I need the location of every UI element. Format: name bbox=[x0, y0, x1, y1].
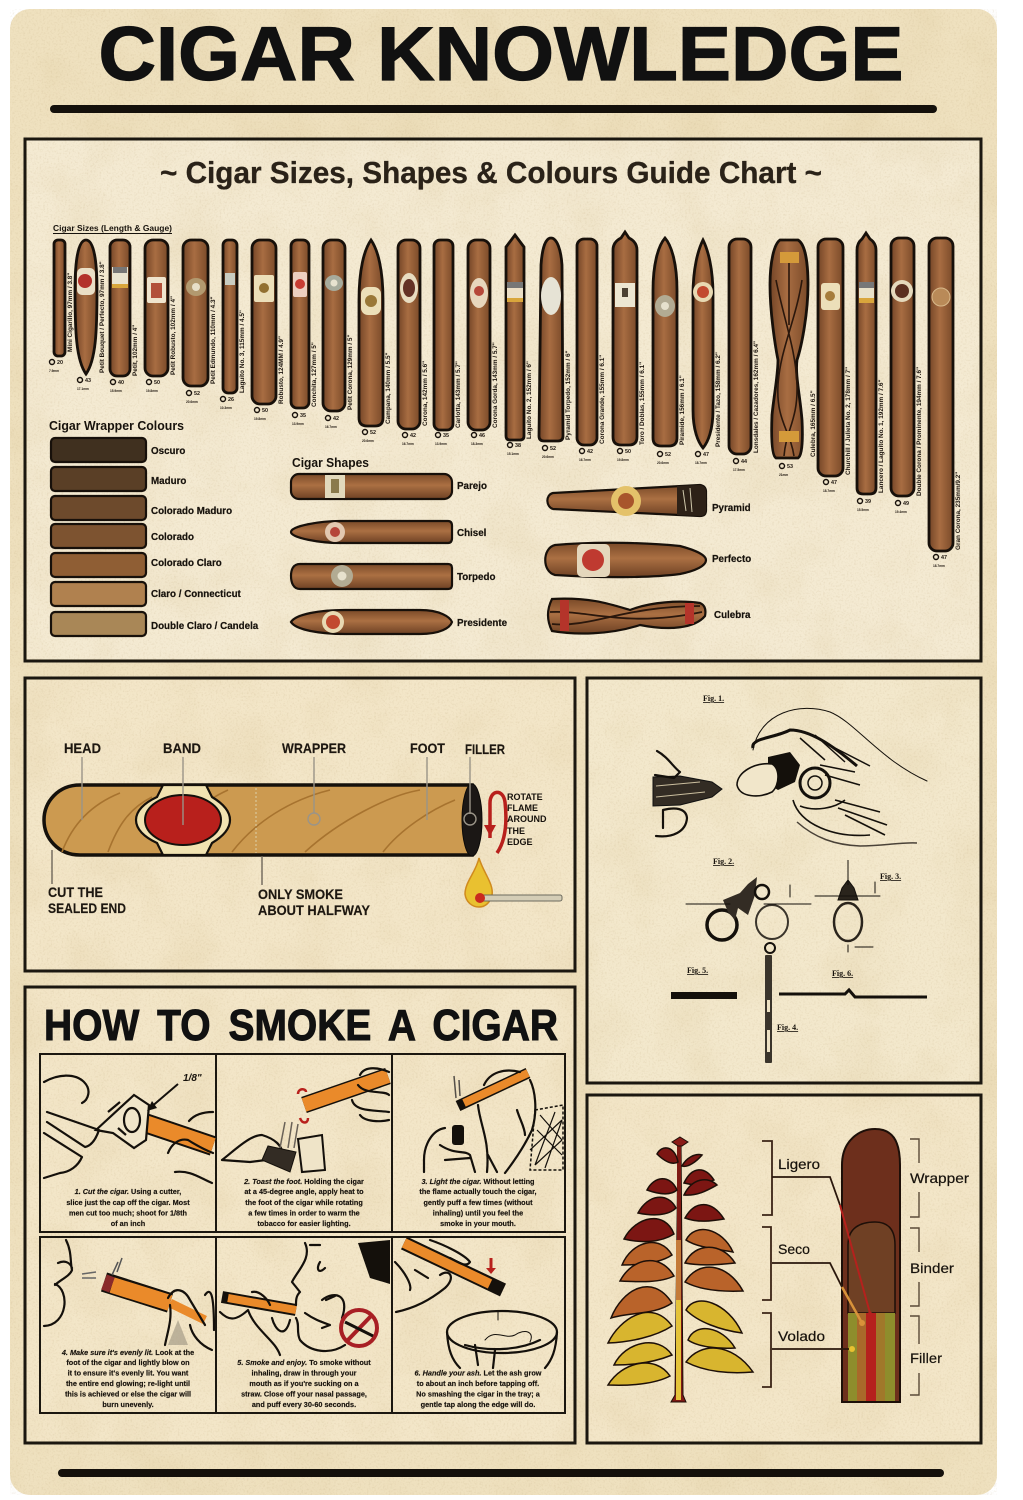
step 4: make sure it is evenly lit: foot of the cigar and lightly blow on bbox=[66, 1358, 190, 1367]
cigar 20: lonsdales: Lonsdales / Cazadores, 162mm / 6.4" bbox=[753, 341, 760, 453]
cigar 14: laguito no. 2: Laguito No. 2, 152mm / 6" bbox=[526, 361, 533, 439]
cigar 20: lonsdales bbox=[729, 239, 760, 472]
step 4: make sure it is evenly lit: the entire end glowing; re-light until bbox=[66, 1379, 190, 1388]
shape: parejo bbox=[291, 474, 487, 499]
cigar 17: toro: 19.8mm bbox=[617, 458, 629, 462]
cigar shapes heading: Cigar Shapes bbox=[292, 455, 369, 470]
step 3: light the cigar: 3. Light the cigar. Without letting bbox=[421, 1177, 535, 1186]
step 2: toast the foot: 2. Toast the foot. Holding the cigar bbox=[244, 1177, 364, 1186]
filler leaves bbox=[848, 1313, 895, 1401]
cigar 14: laguito no. 2: 38 bbox=[515, 443, 521, 449]
step 3: light the cigar: inhaling) until you feel the bbox=[433, 1208, 523, 1218]
cigar 2: petit bouquet: Petit Bouquet / Perfecto, 97mm / 3.8" bbox=[99, 261, 106, 373]
cigar 19: presidente bbox=[693, 240, 722, 465]
swatch: claro connecticut: Claro / Connecticut bbox=[151, 589, 242, 600]
cigar 17: toro: 50 bbox=[625, 449, 631, 455]
step 4: make sure it is evenly lit: this is achieved or else the cigar will bbox=[65, 1390, 191, 1398]
step 4: make sure it is evenly lit: 4. Make sure it's evenly lit. Look at the bbox=[62, 1348, 194, 1357]
leader lines bbox=[52, 757, 476, 885]
cigar 11: corona bbox=[398, 240, 429, 446]
shape: perfecto: Perfecto bbox=[712, 554, 751, 565]
step 1: cut the cigar: slice just the cap off the cigar. Most bbox=[66, 1198, 190, 1207]
step 1: cut the cigar: men cut too much; shoot for 1/8th bbox=[69, 1208, 187, 1218]
cigar 16: corona grande: 16.7mm bbox=[579, 458, 591, 462]
cigar 15: pyramid torpedo: 52 bbox=[550, 446, 556, 452]
step 1: cut the cigar: of an inch bbox=[111, 1219, 145, 1228]
cigar 10: campana: 52 bbox=[370, 430, 376, 436]
cigar 10: campana: 20.6mm bbox=[362, 439, 374, 443]
cigar 2: petit bouquet: 17.1mm bbox=[77, 387, 89, 391]
swatch: double claro candela: Double Claro / Candela bbox=[151, 621, 259, 632]
figure 5 and 6: side bars bbox=[671, 966, 927, 999]
shape: perfecto bbox=[545, 543, 751, 577]
step 2: toast the foot bbox=[222, 1068, 389, 1228]
anatomy labels: WRAPPER bbox=[282, 740, 346, 756]
leaves orange bbox=[611, 1230, 743, 1318]
anatomy notes bbox=[48, 884, 371, 918]
cigar 4: petit robusto: 19.8mm bbox=[146, 389, 158, 393]
step 2: toast the foot: the foot of the cigar while rotating bbox=[245, 1198, 363, 1207]
construction brackets and labels: Binder bbox=[910, 1260, 954, 1276]
shape: parejo: Parejo bbox=[457, 481, 487, 492]
cigar 3: petit: 15.9mm bbox=[110, 389, 122, 393]
cigar 16: corona grande: Corona Grande, 155mm / 6.1" bbox=[599, 355, 606, 444]
step 4: make sure it is evenly lit: it to ensure it's evenly lit. You want bbox=[68, 1368, 189, 1378]
cigar 24: double corona: Double Corona / Prominente, 194mm / 7.6" bbox=[916, 367, 923, 496]
cigar 13: corona gorda bbox=[468, 240, 499, 446]
cigar 13: corona gorda: Corona Gorda, 143mm / 5.7" bbox=[492, 342, 499, 428]
leaf brackets and labels: Volado bbox=[778, 1328, 825, 1344]
cigar 22: churchill: 18.7mm bbox=[823, 489, 835, 493]
cigar 25: gran corona: 47 bbox=[941, 555, 947, 561]
cigar 22: churchill bbox=[818, 239, 852, 493]
swatch: colorado maduro bbox=[51, 496, 232, 520]
anatomy labels: FILLER bbox=[465, 741, 505, 757]
cigar 7: robusto: 19.8mm bbox=[254, 417, 266, 421]
rotate flame arrow: FLAME bbox=[507, 803, 538, 813]
cigar 7: robusto: Robusto, 124MM / 4.9" bbox=[278, 336, 285, 404]
cigar 8: conchita: 13.9mm bbox=[292, 422, 304, 426]
construction brackets and labels: Filler bbox=[910, 1350, 942, 1366]
cigar 5: petit edmundo bbox=[183, 240, 217, 404]
cigar 21: culebra: Culebra, 165mm / 6.5" bbox=[810, 390, 817, 457]
cigar 17: toro: Toro / Doblas, 155mm / 6.1" bbox=[639, 362, 646, 445]
step 3: light the cigar: the flame actually touch the cigar, bbox=[419, 1187, 537, 1196]
cigar sizes subheading: Cigar Sizes (Length & Gauge) bbox=[53, 224, 172, 233]
leaf brackets and labels: Ligero bbox=[778, 1156, 820, 1172]
cigar 1: mini cigarillo: Mini Cigarillo, 97mm / 3.8" bbox=[67, 273, 74, 352]
cigar 15: pyramid torpedo: 20.6mm bbox=[542, 455, 554, 459]
plant stem bbox=[671, 1140, 686, 1402]
cigar 15: pyramid torpedo bbox=[539, 238, 572, 459]
figure 4: cutter handle bbox=[765, 943, 798, 1063]
cigar 25: gran corona: 18.7mm bbox=[933, 564, 945, 568]
top rule bbox=[54, 105, 933, 113]
cigar 11: corona: Corona, 142mm / 5.6" bbox=[422, 361, 429, 426]
cigar 18: piramide: 52 bbox=[665, 452, 671, 458]
cigar 12: carlotta bbox=[434, 240, 462, 446]
leaf brackets and labels: Seco bbox=[778, 1241, 810, 1257]
rotate flame arrow: ROTATE bbox=[507, 792, 543, 802]
rotate flame arrow bbox=[484, 792, 547, 853]
step 5: smoke and enjoy: inhaling, draw in through your bbox=[252, 1368, 357, 1378]
anatomy notes: CUT THE bbox=[48, 884, 103, 900]
cigar 5: petit edmundo: Petit Edmundo, 110mm / 4.3" bbox=[210, 296, 217, 384]
panel: tobacco plant and cigar construction bbox=[587, 1095, 981, 1443]
cigar 5: petit edmundo: 20.6mm bbox=[186, 400, 198, 404]
step 6: handle your ash: 6. Handle your ash. Let the ash grow bbox=[415, 1368, 541, 1378]
cigar 3: petit bbox=[110, 240, 139, 393]
cigar 6: laguito no. 3: 26 bbox=[228, 397, 234, 403]
cigar 23: lancero: 39 bbox=[865, 499, 871, 505]
shape: culebra bbox=[548, 599, 751, 633]
step 3: light the cigar: gently puff a few times (without bbox=[423, 1198, 533, 1207]
swatch: maduro bbox=[51, 467, 186, 491]
wrapper colours heading: Cigar Wrapper Colours bbox=[49, 418, 184, 433]
shape: presidente: Presidente bbox=[457, 618, 508, 629]
panel: how to smoke a cigar bbox=[25, 987, 575, 1443]
cigar 20: lonsdales: 17.5mm bbox=[733, 468, 745, 472]
anatomy labels: BAND bbox=[163, 740, 201, 756]
cigar 1: mini cigarillo bbox=[49, 240, 74, 373]
cigar 11: corona: 42 bbox=[410, 433, 416, 439]
cigar 18: piramide: 20.6mm bbox=[657, 461, 669, 465]
step 5: smoke and enjoy: 5. Smoke and enjoy. To smoke without bbox=[237, 1358, 371, 1367]
figure 4: cutter handle: Fig. 4. bbox=[777, 1023, 798, 1032]
shape: chisel: Chisel bbox=[457, 528, 487, 539]
cigar 9: petit corona: 16.7mm bbox=[325, 425, 337, 429]
swatch: colorado claro: Colorado Claro bbox=[151, 558, 222, 569]
anatomy labels: FOOT bbox=[410, 740, 445, 756]
chart heading: ~ Cigar Sizes, Shapes & Colours Guide Chart ~ bbox=[160, 155, 822, 190]
cigar 24: double corona bbox=[891, 238, 923, 514]
step 1: cut the cigar bbox=[44, 1073, 213, 1228]
swatch: oscuro bbox=[51, 438, 185, 462]
cigar 1: mini cigarillo: 7.9mm bbox=[49, 369, 59, 373]
anatomy notes: ONLY SMOKE bbox=[258, 886, 343, 902]
swatch: claro connecticut bbox=[51, 582, 242, 606]
step 6: handle your ash: to about an inch before tapping off. bbox=[417, 1379, 539, 1388]
step 6: handle your ash: No smashing the cigar in the tray; a bbox=[416, 1390, 541, 1398]
step 1: cut the cigar: 1/8" bbox=[183, 1073, 202, 1084]
cigar 1: mini cigarillo: 20 bbox=[57, 360, 63, 366]
panel: cigar anatomy bbox=[25, 678, 575, 971]
cigar 15: pyramid torpedo: Pyramid Torpedo, 152mm / 6" bbox=[565, 350, 572, 440]
cigar 8: conchita: 35 bbox=[300, 413, 306, 419]
cigar 6: laguito no. 3: Laguito No. 3, 115mm / 4.5" bbox=[239, 310, 246, 393]
cigar 9: petit corona bbox=[323, 240, 354, 429]
cigar 10: campana: Campana, 140mm / 5.5" bbox=[385, 352, 392, 424]
cigar 23: lancero: Lancero / Laguito No. 1, 192mm / 7.6" bbox=[878, 380, 885, 493]
cigar 5: petit edmundo: 52 bbox=[194, 391, 200, 397]
swatch: double claro candela bbox=[51, 612, 259, 636]
cigar 14: laguito no. 2: 15.1mm bbox=[507, 452, 519, 456]
figure 5 and 6: side bars: Fig. 5. bbox=[687, 966, 708, 975]
cigar 2: petit bouquet bbox=[75, 240, 106, 391]
cigar 21: culebra: 53 bbox=[787, 464, 793, 470]
cigar 19: presidente: Presidente / Tazo, 158mm / 6.2" bbox=[715, 352, 722, 447]
panel: cigar cutter patent drawing bbox=[587, 678, 981, 1083]
cigar 24: double corona: 49 bbox=[903, 501, 909, 507]
cigar 23: lancero: 15.5mm bbox=[857, 508, 869, 512]
anatomy labels: HEAD bbox=[64, 740, 101, 756]
leaves yellow bbox=[608, 1301, 753, 1385]
cigar 4: petit robusto: 50 bbox=[154, 380, 160, 386]
anatomy notes: SEALED END bbox=[48, 900, 126, 916]
cigar 12: carlotta: 13.9mm bbox=[435, 442, 447, 446]
cigar 9: petit corona: Petit Corona, 129mm / 5" bbox=[347, 335, 354, 410]
title: CIGAR KNOWLEDGE bbox=[98, 12, 904, 97]
cigar 25: gran corona: Gran Corona, 235mm/9.2" bbox=[955, 472, 962, 550]
cigar cross section bbox=[842, 1129, 900, 1402]
rotate flame arrow: EDGE bbox=[507, 837, 533, 847]
step 5: smoke and enjoy: mouth as if you're sucking on a bbox=[249, 1379, 360, 1388]
swatch: colorado maduro: Colorado Maduro bbox=[151, 506, 232, 517]
step 2: toast the foot: tobacco for easier lighting. bbox=[257, 1219, 351, 1228]
cigar 7: robusto: 50 bbox=[262, 408, 268, 414]
step 3: light the cigar: smoke in your mouth. bbox=[440, 1219, 516, 1228]
step 1: cut the cigar: 1. Cut the cigar. Using a cutter, bbox=[75, 1187, 181, 1196]
step 3: light the cigar bbox=[419, 1071, 563, 1228]
cigar 12: carlotta: 35 bbox=[443, 433, 449, 439]
rotate flame arrow: THE bbox=[507, 826, 525, 836]
rotate flame arrow: AROUND bbox=[507, 814, 547, 824]
figures 2 and 3: cutter rings bbox=[686, 857, 901, 952]
swatch: colorado: Colorado bbox=[151, 532, 194, 543]
construction brackets and labels: Wrapper bbox=[910, 1170, 969, 1186]
step 5: smoke and enjoy: straw. Close off your nasal passage, bbox=[241, 1390, 367, 1398]
cigar 4: petit robusto bbox=[145, 240, 177, 393]
swatch: colorado claro bbox=[51, 553, 222, 577]
step 2: toast the foot: a few times in order to warm the bbox=[248, 1208, 360, 1218]
cigar 18: piramide bbox=[653, 238, 686, 465]
cigar 7: robusto bbox=[252, 240, 285, 421]
cigar 3: petit: 40 bbox=[118, 380, 124, 386]
cigar 18: piramide: Piramide, 156mm / 6.1" bbox=[679, 375, 686, 445]
cigar 8: conchita bbox=[291, 240, 318, 426]
bottom rule bbox=[62, 1469, 940, 1477]
cigar 20: lonsdales: 44 bbox=[741, 459, 747, 465]
step 2: toast the foot: at a 45-degree angle, apply heat to bbox=[244, 1187, 364, 1196]
figure 1: hand with cigar and cutter: Fig. 1. bbox=[703, 694, 724, 703]
tobacco plant bbox=[608, 1137, 753, 1402]
figures 2 and 3: cutter rings: Fig. 3. bbox=[880, 872, 901, 881]
cigar 14: laguito no. 2 bbox=[506, 235, 533, 456]
cigar 21: culebra bbox=[770, 240, 817, 477]
swatch: oscuro: Oscuro bbox=[151, 446, 185, 457]
cigar 9: petit corona: 42 bbox=[333, 416, 339, 422]
anatomy cigar bbox=[44, 784, 482, 856]
cigar 2: petit bouquet: 43 bbox=[85, 378, 91, 384]
cigar foot filler bbox=[462, 784, 482, 856]
flower top bbox=[672, 1137, 688, 1146]
figure 1: hand with cigar and cutter bbox=[653, 694, 927, 846]
construction brackets and labels bbox=[910, 1139, 969, 1395]
cigar 3: petit: Petit, 102mm / 4" bbox=[132, 325, 139, 376]
figure 5 and 6: side bars: Fig. 6. bbox=[832, 969, 853, 978]
cigar 13: corona gorda: 18.3mm bbox=[471, 442, 483, 446]
cigar 19: presidente: 47 bbox=[703, 452, 709, 458]
cigar 23: lancero bbox=[857, 233, 885, 512]
anatomy notes: ABOUT HALFWAY bbox=[258, 902, 371, 918]
step 6: handle your ash: gentle tap along the edge will do. bbox=[421, 1400, 535, 1409]
cigar 16: corona grande: 42 bbox=[587, 449, 593, 455]
shape: pyramid bbox=[547, 485, 751, 516]
connector lines bbox=[772, 1177, 873, 1352]
step 4: make sure it is evenly lit: burn unevenly. bbox=[102, 1400, 154, 1409]
step 4: make sure it is evenly lit bbox=[44, 1240, 214, 1409]
cigar 13: corona gorda: 46 bbox=[479, 433, 485, 439]
cigar 19: presidente: 18.7mm bbox=[695, 461, 707, 465]
panel: cigar sizes, shapes and colours guide chart bbox=[25, 139, 981, 661]
cigar 17: toro bbox=[613, 232, 646, 462]
cigar 6: laguito no. 3: 10.3mm bbox=[220, 406, 232, 410]
shape: presidente bbox=[291, 610, 508, 634]
shape: torpedo bbox=[291, 564, 495, 589]
step grid bbox=[40, 1054, 565, 1413]
step 6: handle your ash bbox=[395, 1240, 557, 1409]
shape: torpedo: Torpedo bbox=[457, 572, 495, 583]
step 5: smoke and enjoy: and puff every 30-60 seconds. bbox=[252, 1400, 356, 1409]
cigar 4: petit robusto: Petit Robusto, 102mm / 4" bbox=[170, 296, 177, 375]
wrapper colour swatches bbox=[51, 438, 259, 636]
cigar 16: corona grande bbox=[577, 239, 606, 462]
leaves dark red bbox=[624, 1148, 724, 1242]
shape: pyramid: Pyramid bbox=[712, 503, 751, 514]
cigar 12: carlotta: Carlotta, 143mm / 5.7" bbox=[455, 361, 462, 428]
cigar 11: corona: 16.7mm bbox=[402, 442, 414, 446]
anatomy labels bbox=[64, 740, 505, 757]
lit match bbox=[465, 858, 562, 907]
cigar band bbox=[136, 785, 230, 855]
step 5: smoke and enjoy bbox=[220, 1240, 390, 1409]
cigar 25: gran corona bbox=[929, 238, 962, 568]
cigar 24: double corona: 19.4mm bbox=[895, 510, 907, 514]
leaf brackets and labels bbox=[762, 1141, 825, 1387]
cigar 6: laguito no. 3 bbox=[220, 240, 246, 410]
cigar 10: campana bbox=[359, 240, 392, 443]
cigar 21: culebra: 21mm bbox=[779, 473, 788, 477]
shape: culebra: Culebra bbox=[714, 610, 751, 621]
swatch: maduro: Maduro bbox=[151, 476, 186, 487]
figures 2 and 3: cutter rings: Fig. 2. bbox=[713, 857, 734, 866]
cigar 8: conchita: Conchita, 127mm / 5" bbox=[311, 342, 318, 407]
shape: chisel bbox=[291, 521, 487, 543]
how to heading: HOW TO SMOKE A CIGAR bbox=[44, 1001, 558, 1050]
cigar 22: churchill: Churchill / Julieta No. 2, 178mm / 7" bbox=[845, 367, 852, 475]
swatch: colorado bbox=[51, 524, 194, 548]
cigar 22: churchill: 47 bbox=[831, 480, 837, 486]
